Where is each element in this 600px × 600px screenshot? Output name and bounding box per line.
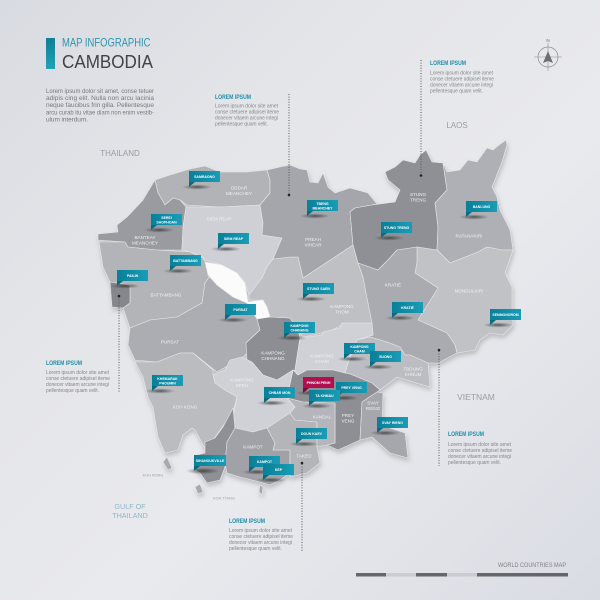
province names on map: KANDAL [313,414,332,420]
pin: Pursat [218,304,256,323]
callout: top centre: donecer vitaem arcune integi [215,116,278,122]
pin: Stung Saen: STUNG SAEN [307,287,330,291]
pin: Battambang [163,255,201,274]
pin: Pailin [110,270,148,289]
label: Gulf of Thailand: GULF OF [114,502,146,511]
pin: Kampot [242,456,280,475]
province names on map [132,186,483,458]
pin: Prey Veng [329,382,367,401]
pin: Stung Treng: STUNG TRENG [384,226,410,230]
province names on map: SVAY [367,400,379,406]
intro text block: Lorem ipsum dolor sit amet, conse tetuer [46,88,155,95]
pin: Svay Rieng [370,417,408,436]
pin: Khemarak Phoumin: PHOUMIN [159,381,176,385]
pin: Senmonorom [483,309,521,328]
callout: top centre: conse ctetuere adipisel iteme [215,110,279,116]
pin: Svay Rieng: SVAY RIENG [382,421,403,425]
province names on map: PURSAT [161,340,179,344]
footer label: WORLD COUNTRIES MAP [498,562,566,569]
pin: Samraong: SAMRAONG [194,175,215,179]
leader line: left [118,295,120,393]
intro text block: arcu curab itu vitae diam non enim vestib- [46,109,154,116]
province names on map: SPEU [236,383,248,388]
pin: Kampong Chhnang: KAMPONG [290,324,309,328]
pin: Stung Treng [374,222,412,241]
province names on map: MEANCHEY [132,240,158,246]
province names on map: KRATIÉ [385,282,401,288]
pin: Battambang: BATTAMBANG [173,259,198,263]
footer segmented bar [356,573,568,576]
province names on map: KOH KONG [173,404,198,410]
pin: Phnom Penh (capital) [296,377,334,396]
province names on map: KHNUM [405,372,422,377]
pin: Kratie: KRATIÉ [401,305,415,310]
leader line: top centre [288,94,290,196]
callout: top right: Lorem ipsum dolor site amet [430,70,493,76]
callout: bottom: pellentesque quam velit. [229,546,282,552]
callout: left: donecer vitaem arcune integi [46,382,109,388]
province names on map: KAMPONG [330,304,354,309]
pin: Senmonorom: SENMONOROM [492,313,519,317]
island label: Koh Rong: KOH RONG [143,474,163,478]
pin: Siem Reap: SIEM REAP [224,237,244,241]
leader line: right [438,349,440,466]
pin: Kampong Chhnang: CHHNANG [291,328,309,332]
pin: Ta Khmau [302,390,340,409]
callout: right: donecer vitaem arcune integi [448,454,511,460]
callout: right: conse ctetuere adipisel iteme [448,448,512,454]
pin: Kep [256,464,294,483]
callout: left: LOREM IPSUM [46,360,82,367]
province names on map: CHHNANG [261,356,285,361]
province names on map: THOM [335,310,349,314]
intro text block: adipis cing elit. Nulla non arcu lacinia [46,95,154,102]
pin: Tbeng Meanchey: TBENG [316,202,329,206]
callout: left [46,360,110,394]
province names on map: BANTEAY [134,235,156,240]
pin: Khemarak Phoumin: KHEMARAK [157,377,178,381]
callout: bottom: Lorem ipsum dolor site amet [229,528,292,534]
province names on map: BATTAMBANG [151,292,182,298]
pin: Kampot: KAMPOT [257,460,273,464]
island label: Koh Tang: KOH TTANG [213,496,235,500]
leader line: bottom [301,462,303,551]
pin: Suong [363,351,401,370]
province names on map: SIEM REAP [206,216,232,222]
pin: Kampong Cham: CHAM [354,349,365,353]
callout: top right [430,60,494,94]
callout: top centre: pellentesque quam velit. [215,122,268,128]
pin: Sihanoukville [186,455,226,474]
pin: Siem Reap [211,233,249,252]
pin: Serei Saophoan [144,214,182,233]
callout: right: LOREM IPSUM [448,431,484,438]
country label: Laos: LAOS [446,121,468,130]
pin: Banlung: BANLUNG [473,205,491,209]
province names on map: STUNG [410,192,426,197]
intro text block [46,88,155,124]
map of Cambodia provinces [98,140,513,495]
callout: top right: pellentesque quam velit. [430,88,483,94]
province names on map: KAMPONG [261,350,285,356]
intro text block: neque faucibus frin gilla. Pellentesque [46,102,154,109]
province names on map: TAKEO [296,454,312,458]
pin: Chbar Mon [257,387,295,406]
province names on map: PREY [342,413,354,418]
country label: Thailand: THAILAND [100,149,140,158]
callout: top centre: LOREM IPSUM [215,94,251,101]
callout: top centre: Lorem ipsum dolor site amet [215,104,278,110]
province names on map: KAMPONG [230,378,254,382]
callout: bottom: conse ctetuere adipisel iteme [229,534,293,540]
callout: left: Lorem ipsum dolor site amet [46,370,109,376]
province names on map: RATANAKIRI [456,234,482,238]
province names on map: KAMPOT [243,444,263,450]
pin: Kampong Cham [337,343,375,362]
label: Gulf of Thailand: THAILAND [112,511,148,520]
province names on map: ODDAR [231,186,248,190]
province names on map: CHAM [315,359,329,364]
icon: compass: N [546,38,550,43]
pin: Pursat: PURSAT [233,308,248,312]
pin: Ta Khmau: TA KHMAU [315,394,334,398]
pin: Phnom Penh (capital): PHNOM PENH [307,381,331,385]
province names on map: VENG [341,418,355,424]
pin: Khemarak Phoumin [145,375,183,394]
callout: bottom: donecer vitaem arcune integi [229,540,292,546]
country label: Vietnam: VIETNAM [457,392,495,402]
province names on map: RIENG [366,406,381,411]
pin: Doun Kaev: DOUN KAEV [301,432,323,436]
leader line: top right [420,60,422,177]
title accent bar [46,38,55,69]
callout: top right: conse ctetuere adipisel iteme [430,76,494,82]
pin: Kep: KEP [275,468,283,472]
callout: bottom [229,518,293,552]
province names on map: TBOUNG [403,366,423,372]
callout: right: pellentesque quam velit. [448,460,501,466]
province names on map: MONDULKIRI [455,288,483,294]
province names on map: TRENG [410,198,426,202]
callout: top right: donecer vitaem arcune integi [430,82,493,88]
pin: Kampong Cham: KAMPONG [350,345,369,349]
pin: Prey Veng: PREY VENG [341,386,362,390]
pin: Suong: SUONG [379,355,392,359]
pin: Sihanoukville: SIHANOUKVILLE [196,459,225,463]
callout: right [448,431,512,466]
pin: Chbar Mon: CHBAR MON [269,391,291,395]
pin: Banlung [459,201,497,220]
pin: Kampong Chhnang [277,322,315,341]
province names on map: PREAH [305,237,321,242]
callout: bottom: LOREM IPSUM [229,518,265,525]
province names on map: VIHEAR [304,242,322,248]
pin: Kratie [385,302,423,321]
pin: Serei Saophoan: SEREI [161,216,172,220]
callout: left: conse ctetuere adipisel iteme [46,376,110,382]
label: Gulf of Thailand [112,502,148,520]
pin: Tbeng Meanchey: MEANCHEY [312,206,333,210]
pin: Stung Saen [296,283,334,302]
icon: compass [534,38,562,71]
title: Cambodia: CAMBODIA [62,51,154,72]
province names on map: MEANCHEY [226,191,252,196]
pin: Tbeng Meanchey [300,200,338,219]
callout: top centre [215,94,279,128]
callout: right: Lorem ipsum dolor site amet [448,442,511,448]
pin: Pailin: PAILIN [127,274,139,278]
pin: Samraong [182,171,220,190]
title: map infographic: MAP INFOGRAPHIC [62,36,151,50]
intro text block: ulum interdum. [46,117,88,124]
province names on map: KAMPONG [310,354,334,358]
pin: Doun Kaev [289,428,327,447]
pin: Serei Saophoan: SAOPHOAN [156,220,177,224]
callout: top right: LOREM IPSUM [430,60,466,67]
callout: left: pellentesque quam velit. [46,388,99,394]
